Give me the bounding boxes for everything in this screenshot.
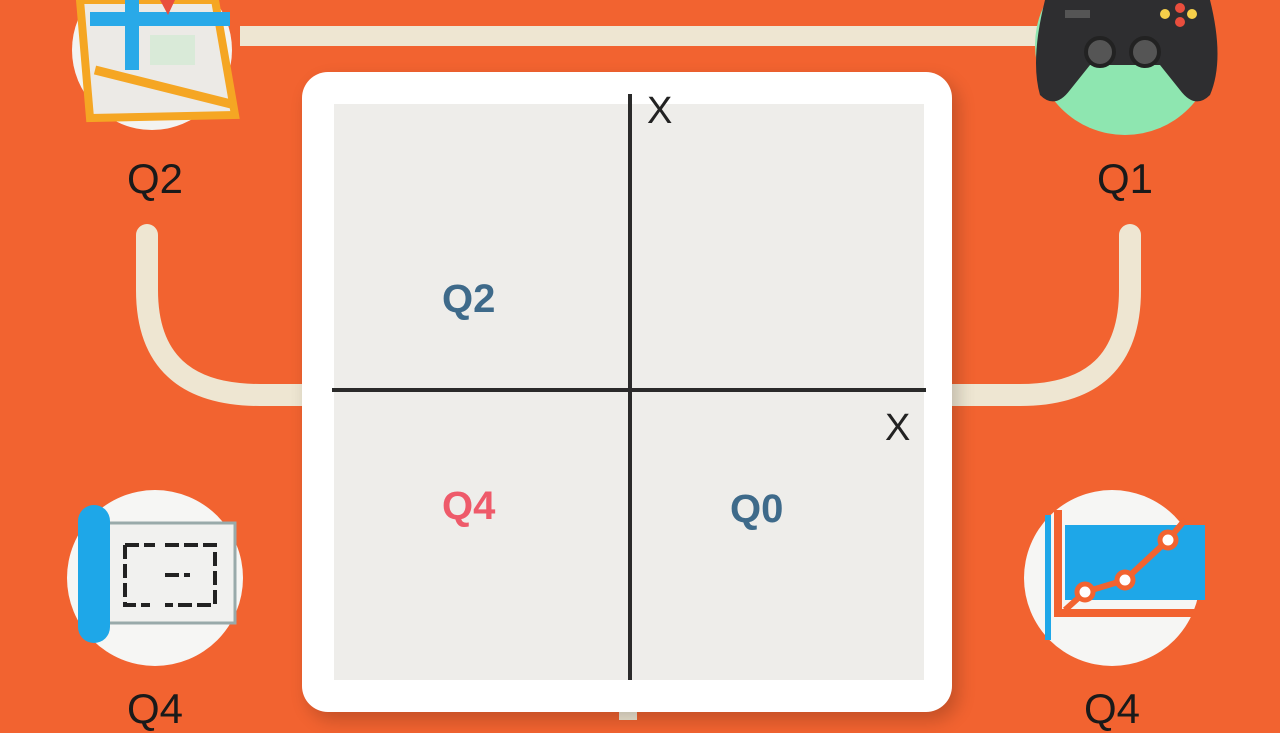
panel: quadrant card <box>302 72 952 712</box>
icon: map <box>72 0 240 130</box>
label: Q4 bottom-right: Q4 <box>1084 685 1140 732</box>
label: Q4 bottom-left: Q4 <box>127 685 183 732</box>
icon: line chart <box>1024 490 1205 666</box>
quadrant grid <box>334 104 924 680</box>
axis label X top: X <box>647 90 672 132</box>
label: Q1 top-right: Q1 <box>1097 155 1153 202</box>
icon: blueprint <box>67 490 243 666</box>
label: Q2 top-left: Q2 <box>127 155 183 202</box>
axis label X right: X <box>885 407 910 449</box>
icon: gamepad <box>1035 0 1218 135</box>
quadrant label Q4: Q4 <box>442 484 495 528</box>
quadrant label Q2: Q2 <box>442 277 495 321</box>
quadrant label Q0: Q0 <box>730 487 783 531</box>
